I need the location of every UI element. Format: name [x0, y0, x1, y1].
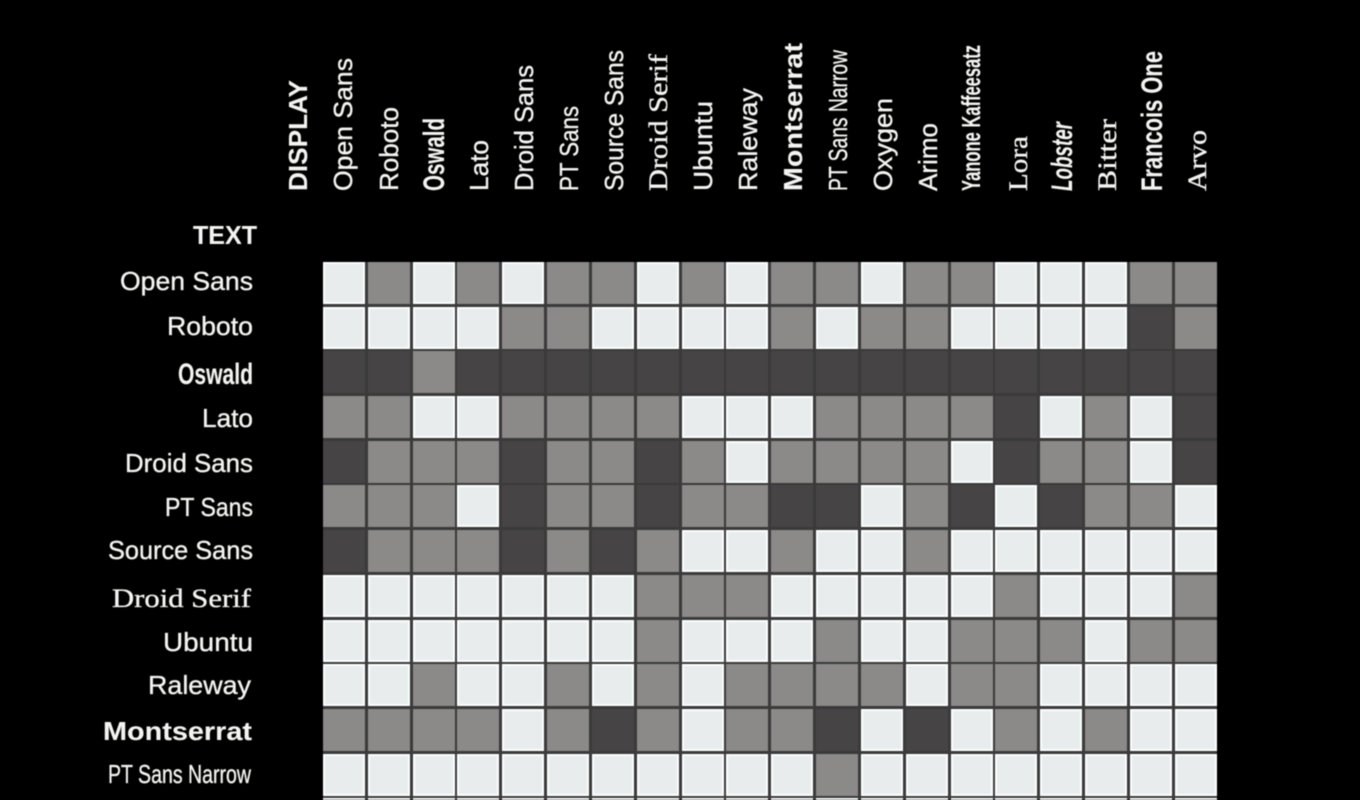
heading: display fonts column labels: Montserrat — [778, 43, 808, 191]
heading: display fonts column labels: Lobster — [1046, 121, 1079, 191]
heading: text fonts row labels: PT Sans Narrow — [108, 759, 251, 789]
heading: text fonts row labels: Droid Serif — [112, 584, 251, 613]
row: Roboto — [322, 306, 1218, 350]
row: Droid Sans — [324, 440, 1216, 484]
heading: display fonts column labels: Bitter — [1093, 119, 1122, 191]
heading: text fonts row labels — [103, 220, 257, 789]
row: Open Sans — [322, 261, 1218, 305]
heading: text fonts row labels: Raleway — [148, 670, 251, 700]
row: next row, cropped at page edge — [322, 797, 1218, 800]
heading: text fonts row labels: Lato — [202, 403, 253, 433]
heading: text fonts row labels: Open Sans — [120, 266, 253, 296]
heading: display fonts column labels: Oxygen — [868, 98, 898, 191]
heading: text fonts row labels: Source Sans — [108, 535, 253, 565]
heading: display fonts column labels: Lora — [1004, 136, 1033, 191]
heading: display fonts column labels: Roboto — [374, 107, 404, 191]
heading: display fonts column labels: Arimo — [913, 123, 943, 191]
heading: display fonts column labels: Droid Sans — [509, 65, 539, 191]
heading: text fonts row labels: Oswald — [178, 358, 253, 391]
row: Raleway — [322, 663, 1218, 707]
row: PT Sans — [322, 484, 1218, 528]
heading: display fonts column labels: Oswald — [418, 118, 451, 191]
row: Montserrat — [322, 708, 1218, 752]
row: Source Sans — [324, 529, 1218, 573]
heading: display fonts column labels: Open Sans — [328, 58, 358, 191]
heading: text fonts row labels: Roboto — [167, 311, 253, 341]
heading: text fonts row labels: Montserrat — [103, 716, 252, 746]
heading: display fonts column labels: Droid Serif — [644, 54, 673, 191]
row: Ubuntu — [322, 619, 1218, 663]
row: Oswald — [324, 350, 1216, 394]
row: Droid Serif — [322, 574, 1218, 618]
heading: display fonts column labels: Ubuntu — [688, 101, 718, 191]
heading: display fonts column labels: PT Sans Narrow — [823, 50, 853, 191]
row: PT Sans Narrow — [322, 753, 1218, 797]
heading: text fonts row labels: PT Sans — [165, 492, 253, 522]
heading: text fonts row labels: Droid Sans — [125, 448, 253, 478]
row: Lato — [322, 395, 1216, 439]
heading: text fonts row labels: TEXT — [193, 220, 257, 250]
heatmap grid — [323, 262, 1217, 800]
heading: display fonts column labels: Lato — [464, 140, 494, 191]
heading: display fonts column labels: Francois One — [1136, 51, 1169, 191]
heading: text fonts row labels: Ubuntu — [163, 627, 253, 657]
heading: display fonts column labels: Raleway — [733, 88, 763, 191]
heading: display fonts column labels: Arvo — [1183, 130, 1212, 191]
heading: display fonts column labels: PT Sans — [554, 106, 584, 191]
heading: display fonts column labels — [283, 43, 1212, 191]
heading: display fonts column labels: DISPLAY — [283, 80, 313, 191]
heading: display fonts column labels: Source Sans — [599, 50, 629, 191]
